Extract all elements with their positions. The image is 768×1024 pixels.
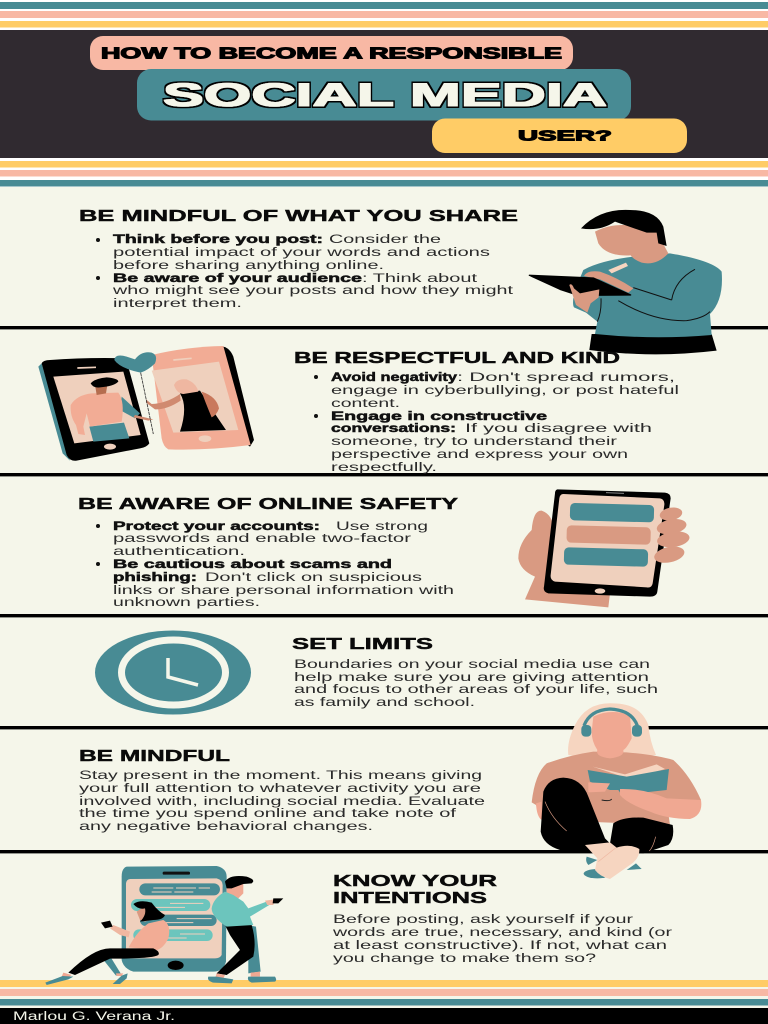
body text — [331, 912, 672, 965]
bullet list: Protect your accounts: — [113, 519, 320, 533]
body text: involved with, including social media. Evaluate — [79, 794, 485, 808]
panel: be respectful and kind — [38, 346, 679, 474]
bullet list: Use strong — [336, 519, 428, 533]
bullet list: Be aware of your audience — [113, 271, 362, 285]
heading: BE RESPECTFUL AND KIND — [294, 350, 620, 367]
title line 1 pill — [90, 36, 573, 70]
bullet list: phishing: — [113, 570, 197, 584]
bullet list: passwords and enable two-factor — [113, 531, 411, 545]
icon: clock — [95, 630, 251, 714]
bullet list: content. — [331, 396, 400, 410]
panel: be mindful of what you share — [79, 208, 722, 354]
bullet list: If you disagree with — [465, 421, 652, 435]
bullet list: Avoid negativity — [331, 370, 457, 384]
heading: SET LIMITS — [292, 636, 434, 653]
body text: words are true, necessary, and kind (or — [331, 925, 672, 939]
bullet list: before sharing anything online. — [113, 258, 384, 272]
heading — [333, 873, 498, 907]
panel: know your intentions — [45, 866, 672, 985]
footer credit bar — [0, 1008, 768, 1024]
footer stripes — [0, 980, 768, 1006]
bullet list: Think before you post: — [113, 232, 323, 246]
heading: BE MINDFUL OF WHAT YOU SHARE — [79, 208, 519, 225]
header stripes: bottom — [0, 158, 768, 187]
header stripes: top — [0, 0, 768, 30]
body text: your full attention to whatever activity you are — [79, 781, 481, 795]
bullet list: perspective and express your own — [331, 447, 628, 461]
bullet list: conversations: — [331, 421, 456, 435]
bullet list: Consider the — [329, 232, 441, 246]
bullet list: authentication. — [113, 544, 245, 558]
body text: any negative behavioral changes. — [79, 819, 373, 833]
title line 2 pill — [137, 69, 631, 120]
bullet list: potential impact of your words and actions — [113, 245, 490, 259]
panel: set limits — [95, 630, 658, 714]
panel: be aware of online safety — [78, 489, 691, 609]
heading: INTENTIONS — [333, 890, 488, 907]
title banner — [0, 30, 768, 158]
body text: you change to make them so? — [333, 951, 596, 965]
bullet list: engage in cyberbullying, or post hateful — [331, 383, 679, 397]
heading: BE MINDFUL — [79, 748, 230, 765]
title line 3 pill — [432, 118, 687, 153]
bullet list: links or share personal information with — [113, 583, 454, 597]
icon: two people with a large phone — [45, 866, 283, 985]
body text: Before posting, ask yourself if your — [333, 912, 633, 926]
panel: be mindful — [79, 703, 701, 879]
bullet list — [96, 232, 514, 310]
title line 3 pill: USER? — [518, 128, 612, 144]
bullet list: who might see your posts and how they might — [111, 283, 514, 297]
bullet list — [314, 370, 679, 474]
body text — [294, 657, 658, 709]
bullet list: : Don't spread rumors, — [457, 370, 675, 384]
bullet list: Don't click on suspicious — [205, 570, 422, 584]
bullet list: respectfully. — [331, 460, 437, 474]
title line 2 pill: SOCIAL MEDIA — [163, 77, 607, 113]
body text: the time you spend online and take note of — [79, 806, 457, 820]
bullet list: interpret them. — [113, 296, 242, 310]
heading: BE AWARE OF ONLINE SAFETY — [78, 496, 458, 513]
bullet list: Engage in constructive — [331, 409, 547, 423]
title line 1 pill: HOW TO BECOME A RESPONSIBLE — [101, 46, 562, 62]
icon: person reading with headphones — [532, 703, 701, 879]
body text — [79, 768, 485, 833]
body text: Stay present in the moment. This means giving — [79, 768, 482, 782]
body text: help make sure you are giving attention — [294, 670, 649, 684]
bullet list — [96, 519, 454, 609]
icon: hand holding phone — [518, 489, 691, 607]
body text: and focus to other areas of your life, such — [294, 682, 658, 696]
icon: man with tablet — [529, 210, 722, 354]
icon: two phones and heart balloon — [38, 346, 254, 461]
bullet list: someone, try to understand their — [331, 434, 617, 448]
bullet list: unknown parties. — [113, 595, 260, 609]
body text: at least constructive). If not, what can — [333, 938, 667, 952]
bullet list: Be cautious about scams and — [113, 557, 392, 571]
heading: KNOW YOUR — [333, 873, 498, 890]
footer credit bar: Marlou G. Verana Jr. — [13, 1011, 175, 1023]
bullet list: : Think about — [362, 271, 478, 285]
body text: as family and school. — [294, 695, 475, 709]
body text: Boundaries on your social media use can — [294, 657, 650, 671]
